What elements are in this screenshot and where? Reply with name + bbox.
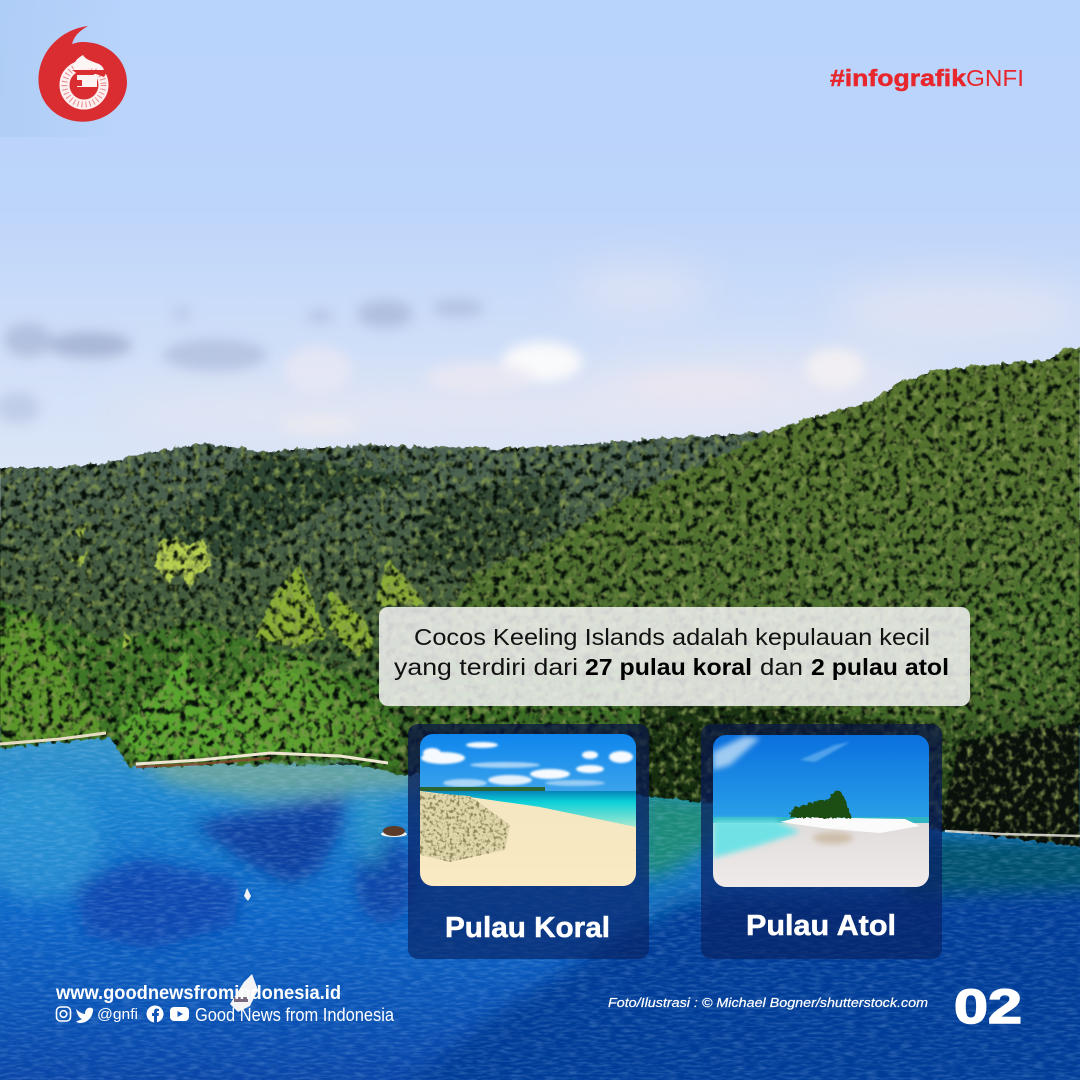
hashtag: #infografik (830, 65, 967, 91)
icon: instagram (56, 1007, 70, 1021)
shaded valley (150, 451, 430, 560)
description box: yang terdiri dari (394, 654, 578, 680)
photo: coral beach (420, 734, 636, 886)
description box: dan (760, 654, 803, 680)
icon: twitter (76, 1008, 93, 1023)
sunlit slopes (0, 470, 640, 765)
logo (38, 26, 127, 122)
background: sea (0, 725, 1080, 1080)
photo credit: Foto/Ilustrasi : © Michael Bogner/shutterstock.com (608, 995, 928, 1010)
hashtag: GNFI (966, 65, 1024, 91)
background: sky (0, 0, 1080, 520)
footer: website and social handles: @gnfi (97, 1006, 138, 1023)
front hill (400, 345, 1080, 848)
description box (379, 607, 970, 706)
description box: 27 pulau koral (585, 654, 752, 680)
background: forested hills (0, 345, 1080, 848)
description box: 2 pulau atol (811, 654, 949, 680)
page number: 02 (954, 981, 1022, 1034)
footer: website and social handles: www.goodnewsfromindonesia.id (55, 983, 341, 1004)
card: Pulau Atol (701, 724, 942, 959)
label: Pulau Koral (445, 912, 610, 944)
shoreline (0, 733, 1080, 836)
photo: atoll (713, 735, 929, 887)
clouds (0, 266, 1080, 435)
footer: website and social handles: Good News from Indonesia (195, 1005, 395, 1025)
boats (230, 826, 407, 1012)
dark lower forest and cliff (640, 700, 945, 832)
icon: facebook (146, 1006, 164, 1023)
icon: youtube (170, 1007, 189, 1021)
logo emblem (64, 55, 108, 104)
label: Pulau Atol (746, 910, 896, 942)
card: Pulau Koral (408, 724, 649, 959)
footer: website and social handles (55, 983, 395, 1025)
hashtag (830, 65, 1024, 91)
description box: Cocos Keeling Islands adalah kepulauan kecil (414, 624, 930, 650)
